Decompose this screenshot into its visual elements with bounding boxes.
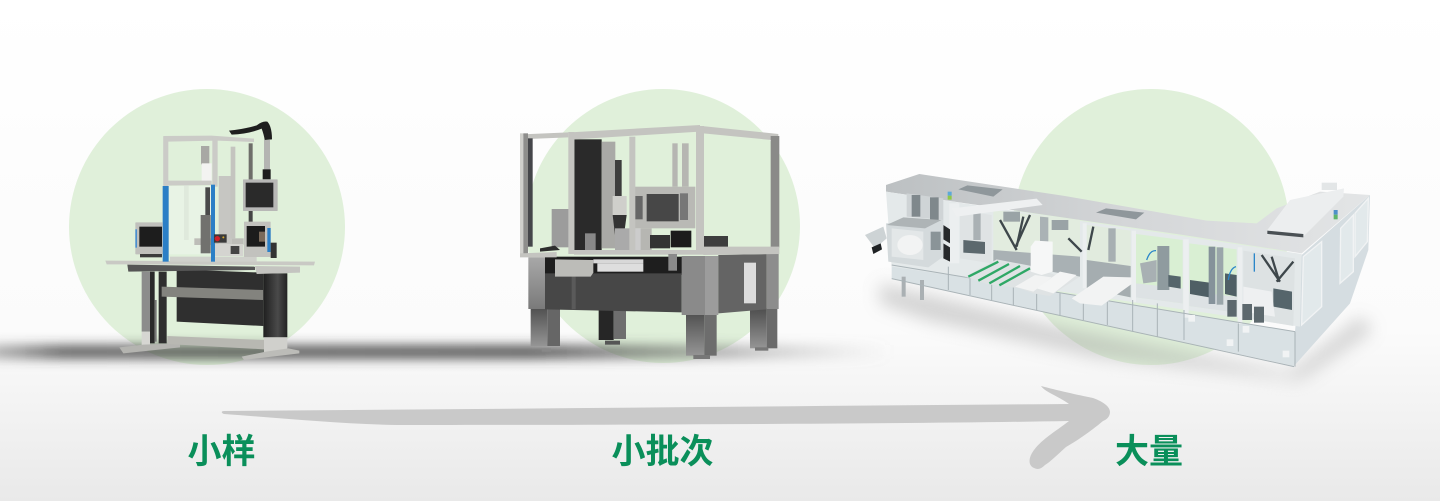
section: window 2 — [1189, 243, 1237, 313]
cabinet front — [892, 265, 1295, 366]
machine support legs — [902, 277, 924, 300]
top surface — [886, 174, 1370, 253]
left table leg — [119, 272, 180, 353]
fixtures — [633, 228, 728, 252]
section: window 1 — [1136, 234, 1183, 303]
floor shadow — [0, 345, 890, 359]
rear hood — [1267, 183, 1344, 237]
top detail units — [958, 185, 1144, 219]
label: mass production: 大量 — [1115, 433, 1183, 471]
machine: mass production line — [865, 174, 1373, 380]
section: window 3 — [1227, 251, 1295, 326]
circle: mass production — [1013, 89, 1289, 365]
right table leg — [242, 273, 299, 360]
storage box — [162, 269, 264, 349]
upper glazing frame — [886, 192, 1302, 327]
right side wall — [1294, 195, 1370, 366]
left grey block — [552, 209, 569, 247]
trend arrow — [222, 386, 1110, 469]
rear columns — [635, 143, 689, 252]
right monitor — [244, 222, 277, 258]
aluminium frame — [163, 136, 254, 187]
emergency stop — [214, 234, 227, 243]
circle: small sample — [69, 89, 345, 365]
left monitor — [135, 222, 163, 257]
control panel — [633, 187, 695, 228]
white product box — [1031, 241, 1053, 275]
infeed station — [865, 217, 943, 267]
vertical window posts — [949, 203, 1242, 324]
black sensor strips — [943, 225, 950, 262]
machine: small sample workstation — [105, 121, 315, 360]
white discharge tray — [1072, 277, 1132, 306]
table top — [105, 257, 315, 274]
robot arm — [952, 199, 1043, 217]
blue hoses — [1147, 251, 1254, 280]
signal lights — [948, 192, 1338, 219]
section: robot windows — [993, 210, 1131, 297]
sliding tray — [540, 246, 677, 277]
machine: small batch cell — [520, 125, 779, 359]
upper monitor — [243, 179, 278, 211]
green conveyors — [965, 259, 1080, 296]
delta robots — [1000, 215, 1293, 282]
circle: small batch — [526, 89, 800, 363]
label: small sample: 小样 — [188, 433, 256, 471]
legs — [531, 307, 777, 359]
section: left rear window — [907, 193, 992, 263]
glass enclosure — [169, 185, 244, 254]
right panels — [1302, 198, 1368, 325]
blue posts — [163, 185, 215, 262]
label: small batch: 小批次 — [612, 433, 714, 471]
central press column — [201, 146, 243, 256]
monitor arm — [229, 121, 272, 223]
spindle — [585, 142, 630, 252]
base cabinet — [528, 254, 779, 315]
line shadow — [880, 283, 1373, 380]
cabinet labels — [1188, 315, 1289, 357]
aluminium frame — [520, 125, 779, 257]
cabinet seams — [892, 265, 1295, 367]
black column — [574, 139, 602, 251]
